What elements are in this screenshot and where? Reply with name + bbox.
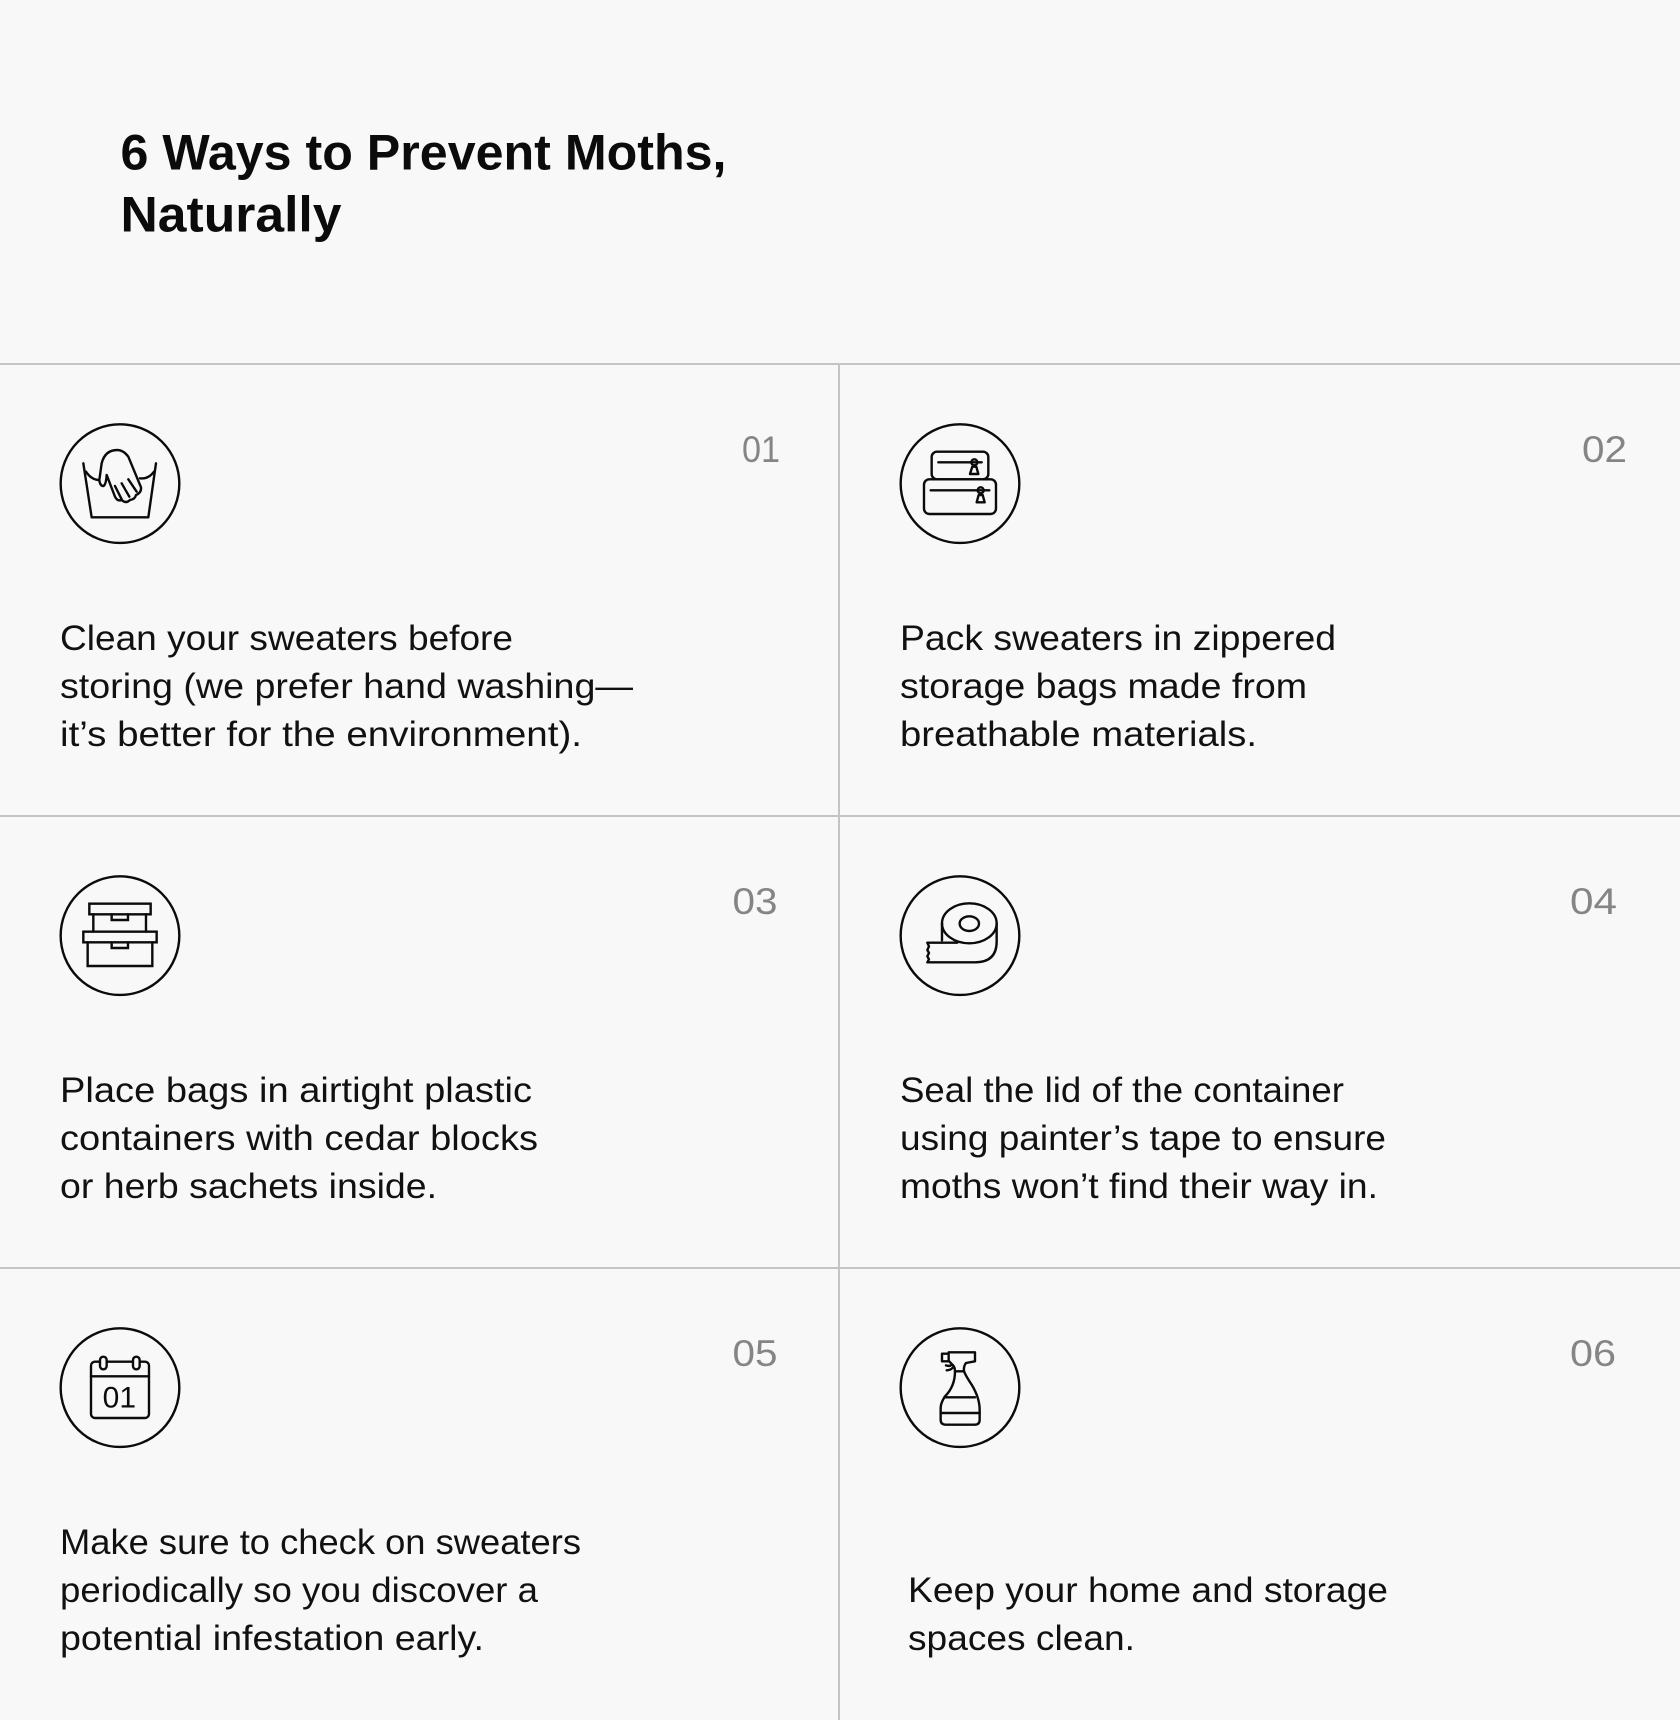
title: Naturally [120, 186, 342, 242]
text: step 04 [900, 1071, 1386, 1206]
text: step 02: Pack sweaters in zippered [900, 619, 1336, 658]
icon: tape roll [901, 876, 1019, 995]
text: step 05: periodically so you discover a [60, 1571, 539, 1610]
text: step 02 [900, 619, 1336, 754]
text: step 02: storage bags made from [900, 667, 1307, 706]
panel: step 03 [60, 876, 778, 1206]
icon: hand washing basin [61, 424, 179, 543]
number 05: 05 [732, 1333, 778, 1374]
number 03: 03 [732, 881, 778, 922]
number 02: 02 [1582, 429, 1627, 470]
text: step 04: using painter’s tape to ensure [900, 1119, 1386, 1158]
text: step 03: containers with cedar blocks [60, 1119, 538, 1158]
text: step 06: spaces clean. [908, 1619, 1135, 1658]
text: step 03: or herb sachets inside. [60, 1167, 437, 1206]
panel: step 05 [60, 1328, 778, 1658]
icon: stacked boxes [61, 876, 179, 995]
panel: step 02 [900, 424, 1627, 754]
icon: calendar [61, 1328, 179, 1447]
text: step 01 [60, 619, 633, 754]
icon: zippered bags [901, 424, 1019, 543]
text: step 06 [908, 1571, 1388, 1658]
panel: step 04 [900, 876, 1617, 1206]
number 01: 01 [742, 429, 780, 470]
text: step 06: Keep your home and storage [908, 1571, 1388, 1610]
text: step 04: moths won’t find their way in. [900, 1167, 1378, 1206]
panel: step 06 [901, 1328, 1616, 1658]
text: step 04: Seal the lid of the container [900, 1071, 1344, 1110]
text: step 05: potential infestation early. [60, 1619, 484, 1658]
text: step 03 [60, 1071, 538, 1206]
title [120, 124, 726, 242]
title: 6 Ways to Prevent Moths, [120, 124, 726, 180]
icon: spray bottle [901, 1328, 1019, 1447]
text: step 05: Make sure to check on sweaters [60, 1523, 581, 1562]
panel: step 01 [60, 424, 780, 754]
text: step 01: storing (we prefer hand washing— [60, 667, 633, 706]
text: step 01: it’s better for the environment). [60, 715, 582, 754]
text: step 01: Clean your sweaters before [60, 619, 513, 658]
number 04: 04 [1570, 881, 1617, 922]
number 06: 06 [1570, 1333, 1616, 1374]
icon: calendar: 01 [103, 1381, 136, 1414]
text: step 03: Place bags in airtight plastic [60, 1071, 532, 1110]
text: step 05 [60, 1523, 581, 1658]
text: step 02: breathable materials. [900, 715, 1257, 754]
